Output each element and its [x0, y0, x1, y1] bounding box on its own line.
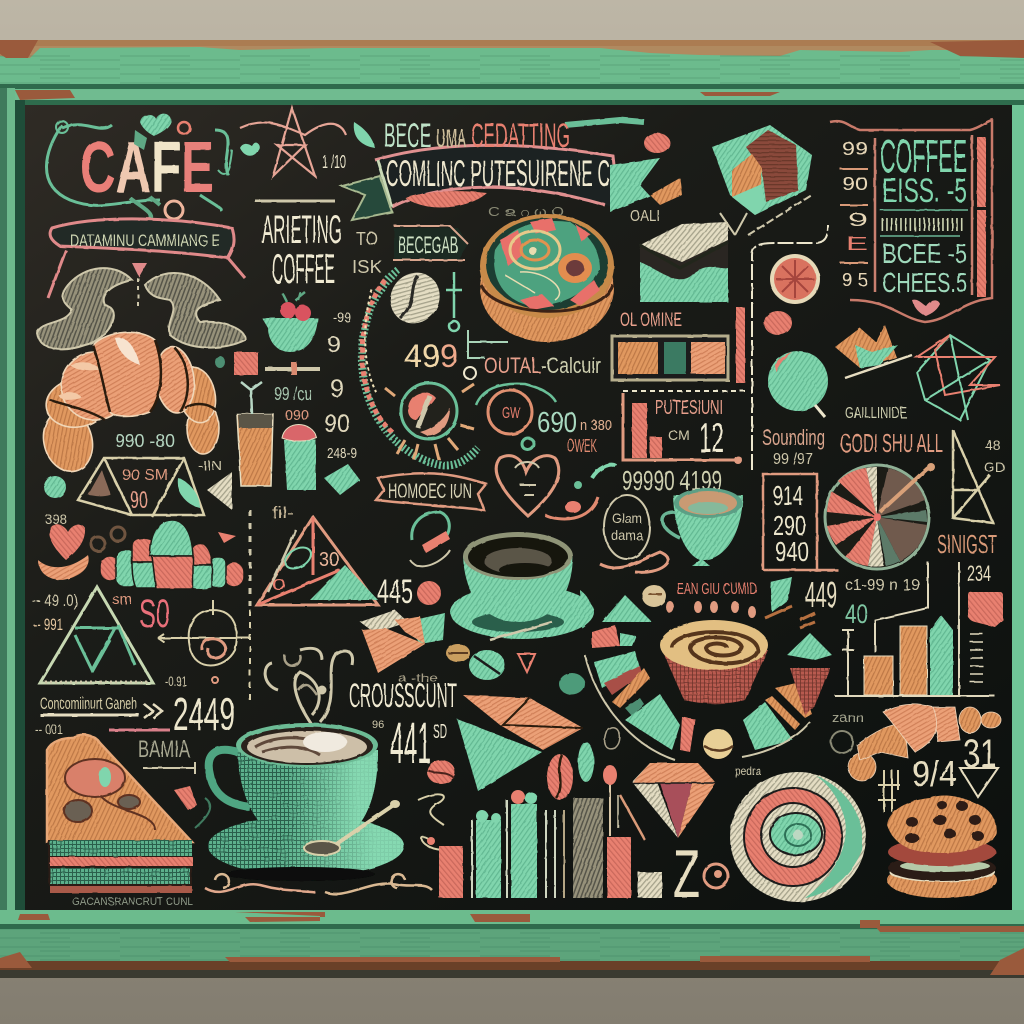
ribbon: subtitle scroll: DATAMINU CAMMIANG E [70, 231, 220, 250]
icon: small green cup [662, 488, 743, 566]
text: numbers near triangle [32, 591, 187, 689]
chart: small pink bars: 99990 4199 [622, 465, 722, 496]
text: numbers bottom right: pedra [735, 764, 761, 778]
icon: concentric target plate [730, 772, 866, 902]
icon: chalk oval note: Glam [612, 510, 642, 526]
text: scattered numbers center: 690 [537, 407, 577, 439]
chart: small pink bars: 12 [699, 414, 724, 461]
icon: large croissant [37, 332, 220, 477]
icon: mint jar and dessert [282, 424, 360, 495]
text: numbers left: 9 [327, 332, 341, 357]
text: numbers left [115, 309, 357, 462]
text: small chalk notes: ISK [352, 257, 382, 277]
text: numbers left: 90 [324, 410, 350, 438]
text: sounding label: GODI SHU ALL [840, 428, 943, 458]
icon: ornate heart [496, 438, 616, 519]
icon: striped macaron croissant [100, 520, 244, 590]
icon: three swatch panel [612, 307, 745, 383]
text: crossunt label: 441 [390, 711, 431, 776]
icon: large envelope [457, 695, 583, 791]
text: crossunt label [349, 677, 457, 776]
ornament: bottom flourish [205, 874, 432, 894]
icon: triangle right: 48 [985, 437, 1001, 453]
text: numbers left: 248-9 [327, 445, 357, 462]
chart: bar chart right: 449 [805, 574, 837, 615]
icon: curl doodle mint [410, 512, 450, 566]
panel: boxed numbers: 940 [775, 536, 809, 567]
text: arrow and 2449: BAMIA [138, 736, 190, 763]
text: arrow and 2449 [35, 688, 235, 774]
icon: pastel folded envelope [360, 610, 445, 673]
banner: top ribbon: BECE ᴜᴍᴀ CEDATTING [384, 117, 570, 155]
icon: chalk oval note: dama [611, 527, 643, 543]
panel: boxed numbers: 914 [773, 480, 803, 511]
panel: coffee price menu: 99 [842, 139, 868, 159]
text: small chalk notes [352, 204, 660, 277]
text: numbers near triangle: -- 991 [33, 615, 63, 634]
text: sounding label: Sounding [762, 425, 825, 450]
chart: triangle with grid: 30 [319, 549, 339, 571]
icon: pin [446, 272, 462, 331]
text: arrow and 2449: 2449 [173, 688, 235, 740]
ribbon: subtitle scroll [48, 219, 245, 298]
icon: steam swirls [265, 648, 353, 725]
text: Z and O: Z [673, 836, 700, 912]
panel: coffee price menu: CHEES.5 [882, 267, 967, 298]
banner: top ribbon: COMLINC PUTESUIRENE C [386, 153, 610, 194]
icon: chalk tent diagram: -IIN [198, 458, 222, 473]
icon: triangle outline left [40, 587, 153, 683]
icon: small croissant right [848, 704, 1001, 781]
chalk artwork: CROUSSCUNT [349, 677, 457, 715]
icon: triangle right: GD [984, 459, 1005, 475]
chart: small pink bars: PUTESIUNI [655, 397, 723, 419]
text: scattered numbers center: n 380 [580, 417, 612, 434]
icon: cookie sandwich [887, 795, 997, 898]
icon: pink square and slider [215, 352, 320, 375]
chalk artwork: ARIETING [262, 208, 342, 252]
icon: pink oval small [764, 311, 792, 335]
panel: boxed numbers: 290 [773, 510, 806, 541]
panel: coffee price menu: IIIIIIIIIIIIIIIIII [880, 215, 964, 235]
text: arrow and 2449: Concomiinurt Ganeh [40, 694, 137, 713]
icon: gem diamond [632, 763, 716, 838]
chalk artwork [32, 108, 1005, 912]
text: sounding label [762, 405, 943, 468]
icon: compass emblem [158, 600, 250, 700]
icon: radial wedges around latte bowl [580, 577, 832, 760]
text: numbers left: 9 [330, 375, 344, 403]
icon: geometric star outline [917, 335, 1000, 420]
icon: pink circle with swirl: GW [502, 405, 521, 422]
text: caption under cake: GACANSRANCRUT CUNL [72, 896, 193, 908]
label: small sign: BECEGAB [398, 232, 458, 259]
text: numbers left: 090 [285, 407, 309, 424]
icon: pink circle with swirl [476, 384, 556, 434]
panel: boxed numbers [763, 474, 838, 570]
text: arrow and 2449: -- 001 [35, 721, 63, 737]
text: numbers left: 990 -80 [115, 431, 175, 451]
icon: large latte cup [208, 723, 404, 881]
icon: round decorated cake [480, 214, 614, 342]
icon: chalk oval note [600, 495, 668, 572]
text: outal calcuir label: OUTAL-Calcuir [484, 353, 601, 378]
label: small sign homic [376, 473, 486, 510]
text: crossunt label: 96 [372, 719, 384, 731]
icon: coffee beans small: a -the [398, 671, 438, 685]
label: small sign homic: HOMOEC IUN [388, 480, 472, 503]
text: crossunt label: SD [433, 721, 447, 743]
text: numbers bottom right [735, 710, 998, 812]
icon: citrus slice [770, 254, 820, 304]
panel: coffee price menu: E [846, 234, 868, 254]
icon: chalk tent diagram [44, 458, 232, 527]
panel: coffee price menu: 9 [848, 210, 868, 230]
icon: isometric blocks [712, 125, 812, 235]
icon: chalk tent diagram: 90 SM [122, 467, 168, 484]
icon: layered cake slice [47, 735, 210, 893]
chalk artwork: COFFEE [272, 245, 335, 292]
icon: star outline and small number [240, 108, 346, 201]
text: numbers near triangle: -- 49 .0) [32, 591, 78, 610]
chart: small pink bars: CM [668, 427, 690, 443]
title: cafe lettering with flourishes [46, 114, 259, 225]
text: ol omine: OL OMINE [620, 310, 682, 331]
text: sounding label: GAILLINIDE [845, 405, 907, 422]
text: numbers near triangle: S0 [139, 592, 170, 636]
text: numbers near triangle: -0.91 [165, 673, 187, 689]
icon: mint balloon [768, 351, 828, 417]
icon: origami folded [835, 325, 912, 378]
icon: star outline and small number: 1 /10 [322, 152, 346, 172]
text: numbers left: -99 [333, 309, 351, 325]
panel: coffee price menu: 90 [842, 174, 868, 194]
chart: bar chart right [805, 561, 1003, 696]
icon: coffee beans small [398, 644, 585, 695]
icon: central latte emblem [385, 383, 474, 460]
chart: small pink bars [622, 391, 745, 496]
text: sounding label: 99 /97 [773, 451, 813, 468]
chart: bar chart right: 40 [845, 599, 868, 629]
icon: radial pie wheel [825, 463, 935, 569]
icon: iced drink glass [237, 382, 273, 486]
chart: bar chart right: c1-99 n 19 [845, 577, 920, 594]
connector: chalk line [752, 225, 828, 470]
text: numbers bottom right: 31 [963, 732, 997, 776]
heading: marketing coffee [262, 208, 342, 292]
text: small chalk notes: TO [356, 229, 378, 249]
text: numbers near triangle: sm [112, 591, 132, 608]
text: 445: 445 [377, 573, 413, 611]
chalkboard surface [25, 105, 1012, 910]
text: 499 with striped arc: 499 [404, 338, 458, 374]
chart: triangle with grid [250, 505, 441, 606]
icon: beans and doodles [418, 742, 645, 850]
icon: latte bowl with spiral [660, 620, 768, 704]
text: outal calcuir label [464, 330, 601, 379]
icon: coffee bean [380, 263, 450, 333]
icon: triangle right [953, 430, 1005, 523]
chart: bottom bar chart [439, 790, 662, 898]
icon: envelope mint [640, 222, 728, 302]
chart: triangle with grid: 0 [272, 577, 286, 594]
icon: main black coffee cup [450, 532, 594, 640]
panel: coffee price menu: EISS. -5 [882, 172, 967, 210]
panel: coffee price menu: BCEE -5 [882, 238, 967, 269]
label: small sign [393, 226, 468, 260]
text: numbers bottom right: zann [832, 710, 864, 725]
icon: chalk tent diagram: 90 [130, 487, 148, 514]
chart: triangle with grid: fil- [272, 505, 294, 522]
icon: heart chalk [38, 525, 125, 580]
title: cafe lettering with flourishes: CAFE [80, 128, 214, 208]
text: numbers bottom right: 9/4 [912, 753, 957, 794]
text: 499 with striped arc [362, 270, 478, 465]
panel: coffee price menu: 9 5 [842, 270, 868, 290]
chart: bar chart right: 234 [967, 561, 991, 586]
icon: mint cup with berries [262, 292, 318, 352]
icon: chalk tent diagram: 398 [45, 511, 67, 527]
icon: ribbons sketch [37, 263, 245, 349]
text: small chalk notes: C ຂ ဂ ω O [488, 204, 564, 219]
text: small chalk notes: OALI [630, 208, 660, 225]
icon: radial wedges around latte bowl: EAN GIU CUMID [677, 581, 757, 598]
text: scattered numbers center [537, 407, 612, 456]
text: scattered numbers center: OWEK [567, 436, 597, 456]
panel: coffee price menu [830, 120, 992, 322]
banner: top ribbon [342, 117, 682, 220]
text: numbers left: 99 /cu [274, 384, 312, 404]
